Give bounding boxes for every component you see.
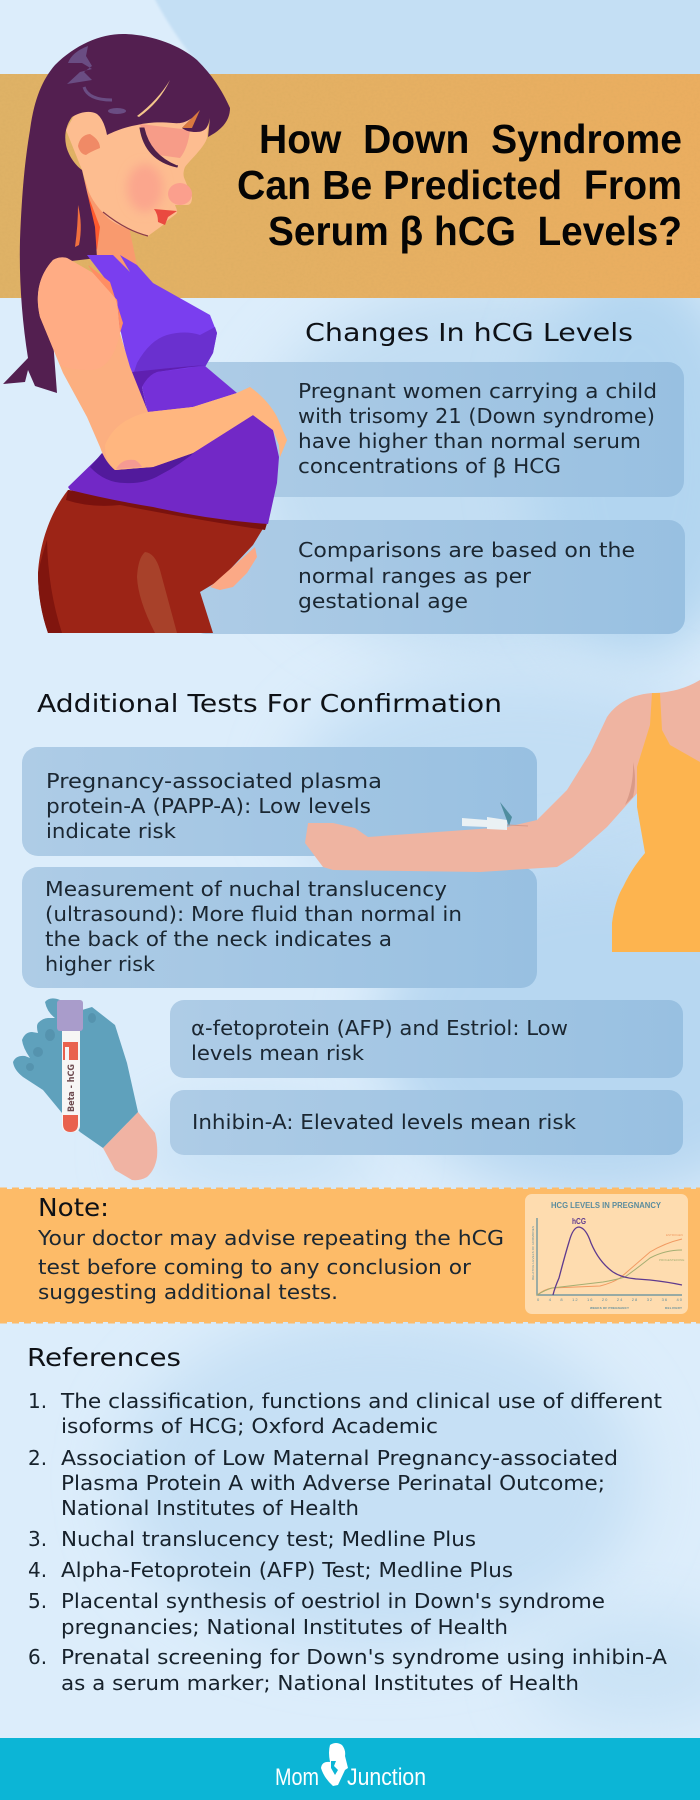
heading: additional tests: Additional Tests For Confirmation — [37, 689, 502, 718]
references list: 4. — [28, 1558, 47, 1582]
note text: test before coming to any conclusion or — [38, 1255, 472, 1279]
note text: suggesting additional tests. — [38, 1280, 338, 1304]
eye — [140, 128, 178, 167]
arm — [305, 693, 660, 872]
chart: hCG levels in pregnancy: 0 4 8 12 16 20 24 28 32 36 40 — [537, 1297, 683, 1302]
armpit sliver — [88, 265, 123, 333]
tube label — [63, 1042, 78, 1060]
neck skin — [655, 680, 700, 765]
references list: Association of Low Maternal Pregnancy-associated — [61, 1446, 618, 1470]
note text: Note: — [38, 1193, 109, 1222]
pants waist shade — [66, 490, 268, 530]
lips — [154, 209, 177, 225]
text: higher serum concentrations: Pregnant women carrying a child — [298, 379, 657, 403]
hair — [3, 34, 230, 393]
text: higher serum concentrations: concentrations of β HCG — [298, 454, 561, 478]
chart: hCG levels in pregnancy: hCG — [572, 1217, 586, 1226]
chart: hCG levels in pregnancy: ESTROGEN — [666, 1233, 683, 1237]
chart: hCG levels in pregnancy: PROGESTERONE — [659, 1258, 684, 1262]
references list: Prenatal screening for Down's syndrome using inhibin-A — [61, 1645, 667, 1669]
panel: PAPP-A — [22, 747, 537, 856]
text: comparisons — [298, 538, 635, 613]
hair sliver — [75, 205, 81, 247]
ear — [78, 134, 100, 155]
panel: nuchal translucency: Measurement of nuchal translucency — [45, 877, 447, 901]
panel: inhibin-A: Inhibin-A: Elevated levels mean risk — [192, 1110, 576, 1134]
forearm — [103, 1112, 157, 1180]
note band — [0, 1188, 700, 1322]
text: higher serum concentrations — [298, 379, 657, 478]
heading: changes in hCG levels: Changes In hCG Levels — [305, 318, 633, 347]
logo: MomJunction: Junction — [347, 1764, 426, 1791]
heading: references: References — [27, 1343, 181, 1372]
header band — [0, 74, 700, 298]
panel: AFP and estriol: α-fetoprotein (AFP) and Estriol: Low — [191, 1016, 568, 1040]
references list: Plasma Protein A with Adverse Perinatal Outcome; — [61, 1471, 605, 1495]
pants — [38, 490, 267, 633]
tube blood — [63, 1115, 78, 1132]
title: Can Be Predicted From — [237, 162, 682, 208]
pants side shade — [38, 540, 62, 633]
logo: MomJunction: Mom — [275, 1764, 319, 1791]
chart: hCG levels in pregnancy: RELATIVE LEVELS OF HORMONES — [531, 1226, 535, 1280]
panel: AFP and estriol — [170, 1000, 683, 1078]
tube cap — [57, 1000, 83, 1031]
references list: as a serum marker; National Institutes of Health — [61, 1671, 579, 1695]
panel: nuchal translucency: higher risk — [45, 952, 155, 976]
arm crease — [625, 762, 635, 805]
panel: changes in hCG levels, first card — [190, 362, 684, 497]
belly upper — [142, 366, 237, 414]
references list: National Institutes of Health — [61, 1496, 359, 1520]
note text: Your doctor may advise repeating the hCG — [37, 1226, 504, 1250]
face — [66, 105, 210, 236]
chart curve: estrogen — [537, 1239, 682, 1295]
illustration: pregnant woman — [3, 34, 287, 633]
neck shadow — [86, 190, 100, 250]
forehead shade — [140, 124, 190, 158]
cheek blush — [127, 164, 163, 212]
hair strand — [137, 80, 170, 117]
tube — [62, 1020, 80, 1132]
top band — [132, 365, 205, 414]
text: higher serum concentrations: have higher than normal serum — [298, 429, 641, 453]
references list: Alpha-Fetoprotein (AFP) Test; Medline Plus — [61, 1558, 513, 1582]
nose — [168, 183, 192, 205]
upper arm highlight — [38, 257, 120, 370]
references list: 6. — [28, 1645, 47, 1669]
illustration: arm with syringe — [305, 680, 700, 952]
top — [612, 693, 700, 952]
strap — [62, 242, 80, 258]
references list: The classification, functions and clinical use of different — [60, 1389, 662, 1413]
text: higher serum concentrations: with trisomy 21 (Down syndrome) — [298, 404, 655, 428]
tube wing — [500, 802, 512, 826]
elbow crease — [116, 460, 142, 469]
panel: nuchal translucency — [22, 867, 537, 988]
arm shadow on belly — [90, 448, 200, 483]
streak under fringe — [182, 110, 200, 128]
panel: changes in hCG levels, second card — [190, 520, 685, 634]
panel: AFP and estriol: levels mean risk — [191, 1041, 364, 1065]
logo icon — [321, 1743, 348, 1786]
forearm highlight — [105, 387, 287, 470]
references list: 1. — [28, 1389, 47, 1413]
chart curve: hCG — [553, 1227, 682, 1295]
lower belly — [68, 415, 279, 524]
panel: PAPP-A: Pregnancy-associated plasma — [46, 769, 382, 793]
logo baby — [331, 1761, 338, 1775]
chart: hCG levels in pregnancy — [525, 1194, 688, 1314]
references list — [28, 1389, 667, 1695]
panel: nuchal translucency: (ultrasound): More fluid than normal in — [45, 902, 462, 926]
top upper — [87, 255, 217, 385]
illustration: gloved hand holding test tube — [13, 998, 157, 1180]
references list: 5. — [28, 1589, 47, 1613]
references list: Placental synthesis of oestriol in Down's syndrome — [61, 1589, 605, 1613]
chart: hCG levels in pregnancy: DELIVERY — [665, 1306, 682, 1310]
footer bar — [0, 1738, 700, 1800]
pants highlight — [137, 552, 177, 633]
note text — [37, 1193, 504, 1304]
syringe — [462, 817, 507, 830]
references list: pregnancies; National Institutes of Health — [61, 1615, 508, 1639]
chart curve: progesterone — [537, 1250, 682, 1295]
title: Serum β hCG Levels? — [268, 208, 682, 254]
panel: PAPP-A: protein-A (PAPP-A): Low levels — [46, 794, 371, 818]
references list: 3. — [28, 1527, 47, 1551]
chart: hCG levels in pregnancy: HCG LEVELS IN PREGNANCY — [551, 1201, 662, 1210]
arm — [38, 257, 287, 470]
tube text: Beta - hCG — [67, 1064, 77, 1112]
references list: Nuchal translucency test; Medline Plus — [61, 1527, 476, 1551]
jaw line — [103, 212, 148, 236]
text: comparisons: normal ranges as per — [298, 564, 532, 588]
text: comparisons: gestational age — [298, 589, 468, 613]
title: How Down Syndrome — [259, 116, 682, 162]
references list: 2. — [28, 1446, 47, 1470]
panel: nuchal translucency: the back of the neck indicates a — [45, 927, 392, 951]
text: comparisons: Comparisons are based on the — [298, 538, 635, 562]
title — [237, 116, 682, 254]
chart: hCG levels in pregnancy: WEEKS OF PREGNANCY — [590, 1306, 629, 1310]
hair highlight — [67, 46, 92, 84]
glove — [13, 998, 138, 1148]
syringe needle — [507, 825, 528, 826]
neck — [84, 180, 138, 270]
top bust shade — [133, 327, 217, 375]
lower hand — [210, 547, 257, 590]
references list: isoforms of HCG; Oxford Academic — [61, 1414, 438, 1438]
panel: PAPP-A: indicate risk — [46, 819, 176, 843]
fingertip shading — [26, 1013, 96, 1071]
logo: MomJunction — [275, 1743, 426, 1791]
panel: inhibin-A — [170, 1090, 683, 1155]
